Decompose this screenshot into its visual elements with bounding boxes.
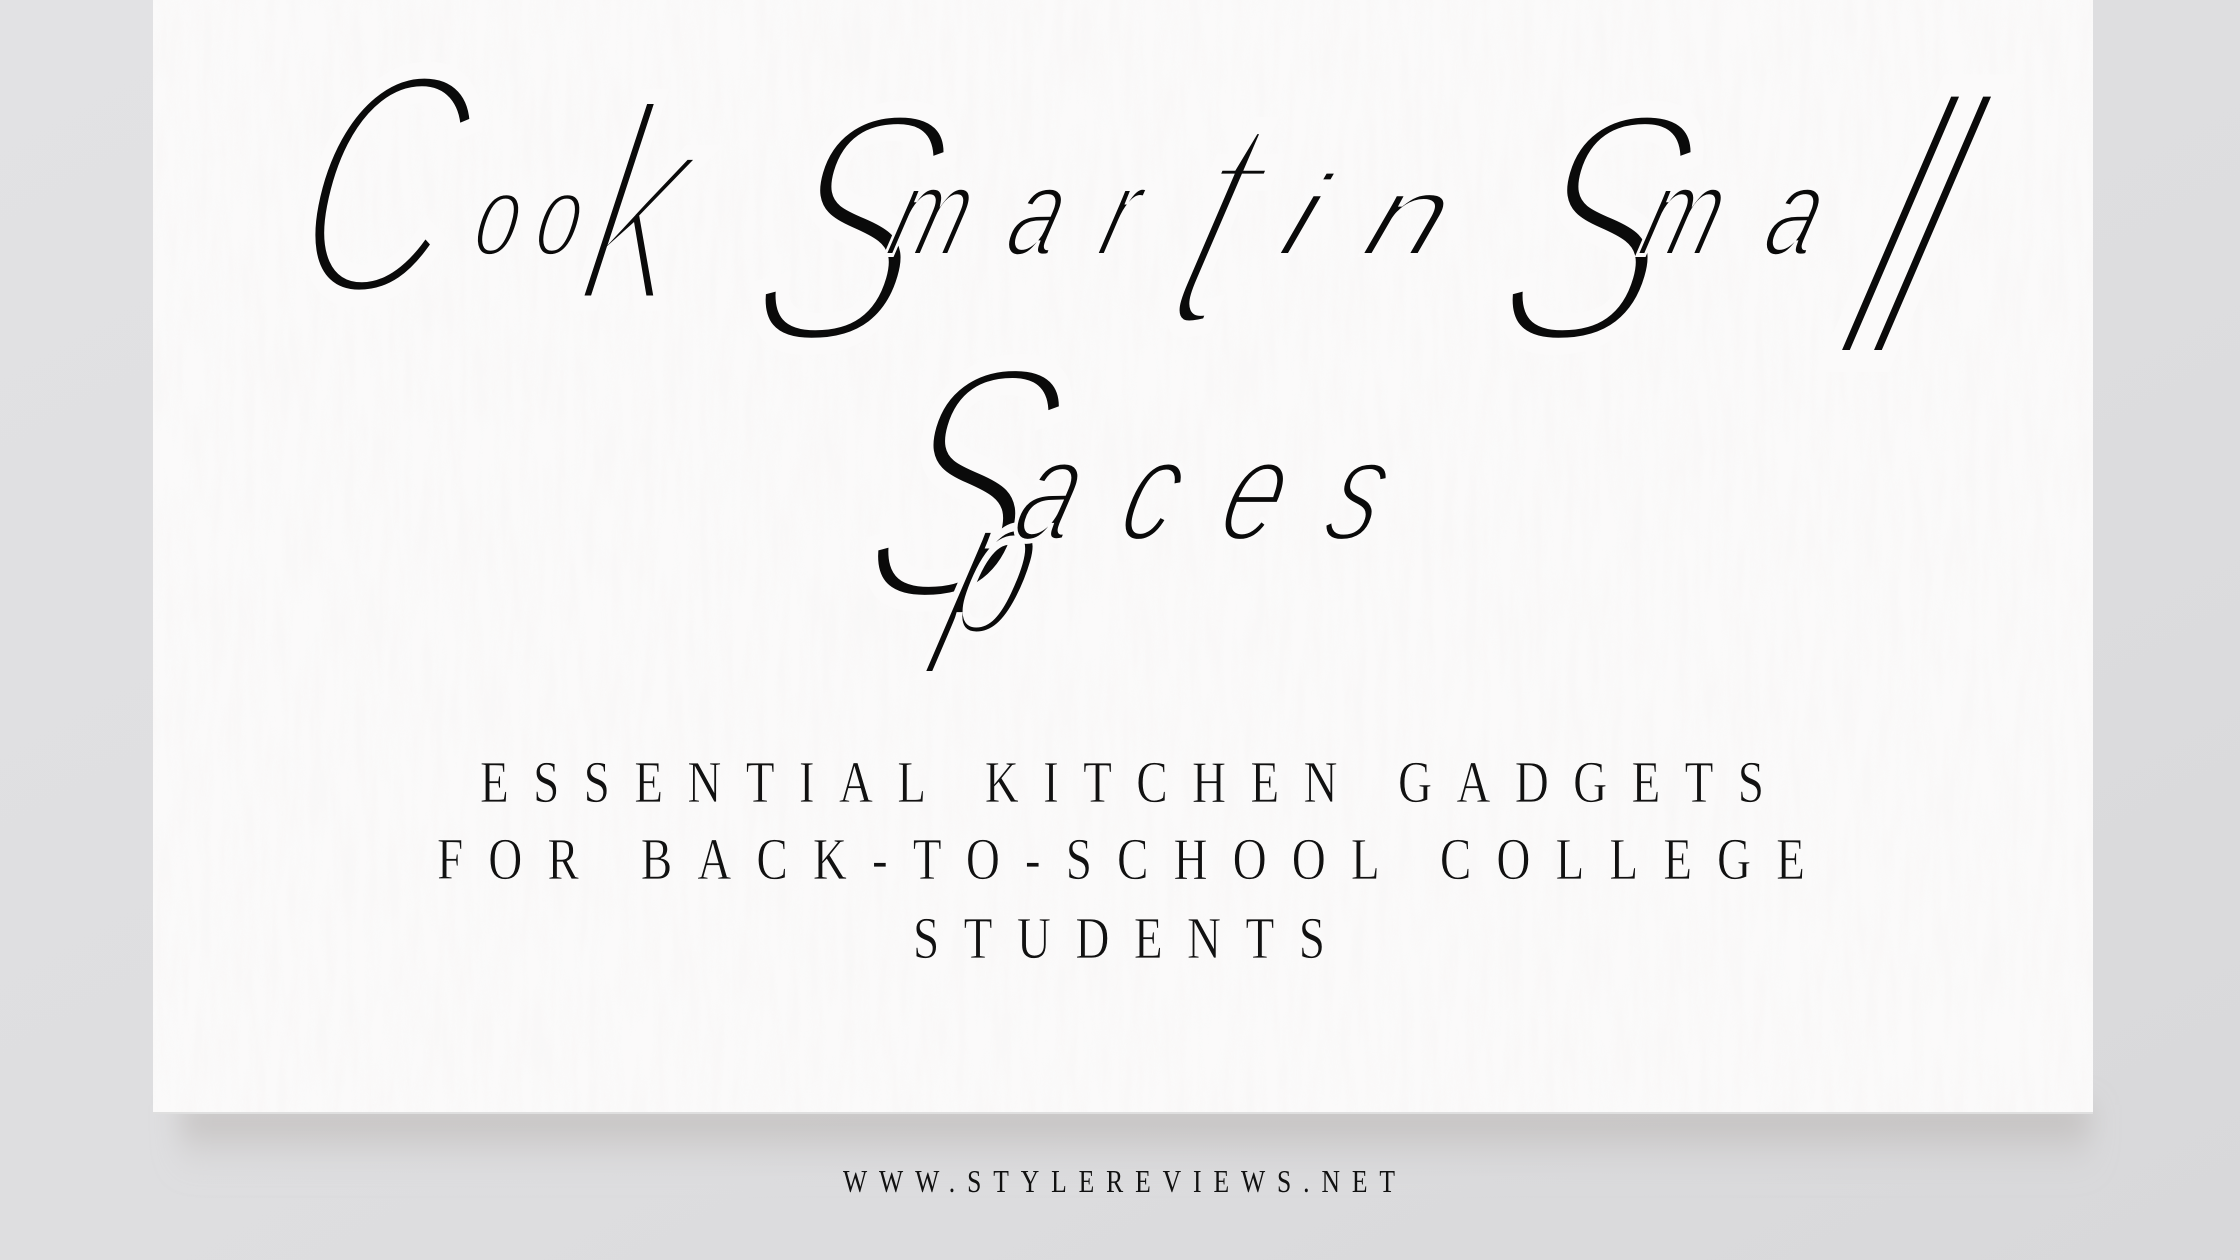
subtitle line 3: STUDENTS bbox=[913, 905, 1325, 971]
paper shadow bbox=[180, 1105, 2090, 1175]
title line 1 word: Small: S bbox=[1464, 39, 1734, 414]
panel: white paper sheet bbox=[153, 0, 2093, 1114]
title: script heading bbox=[270, 5, 2025, 676]
title line 1 word: Cook: C bbox=[270, 5, 500, 364]
title line 1 word: Smart: t bbox=[1138, 46, 1309, 392]
title line 1 word: Smart: mar bbox=[876, 142, 1201, 282]
title line 1 word: in: in bbox=[1266, 151, 1524, 280]
title line 1 word: Small: ma bbox=[1628, 142, 1891, 282]
subtitle line 1: ESSENTIAL KITCHEN GADGETS bbox=[480, 749, 1764, 815]
title line 1 word: Cook: k bbox=[562, 47, 729, 364]
subtitle bbox=[437, 749, 1805, 971]
subtitle line 2: FOR BACK-TO-SCHOOL COLLEGE bbox=[437, 826, 1805, 892]
title line 1 word: Small: l bbox=[1833, 18, 2025, 443]
footer: website URL: WWW.STYLEREVIEWS.NET bbox=[843, 1164, 1395, 1200]
title line 1 word: Small: l bbox=[1801, 18, 1993, 443]
title line 2 word: Spaces: p bbox=[920, 453, 1069, 676]
title line 2 word: Spaces: aces bbox=[1000, 408, 1458, 571]
title line 1 word: Smart: S bbox=[717, 39, 987, 414]
title line 1 word: Cook: oo bbox=[465, 152, 613, 280]
title line 2 word: Spaces: S bbox=[828, 292, 1103, 673]
